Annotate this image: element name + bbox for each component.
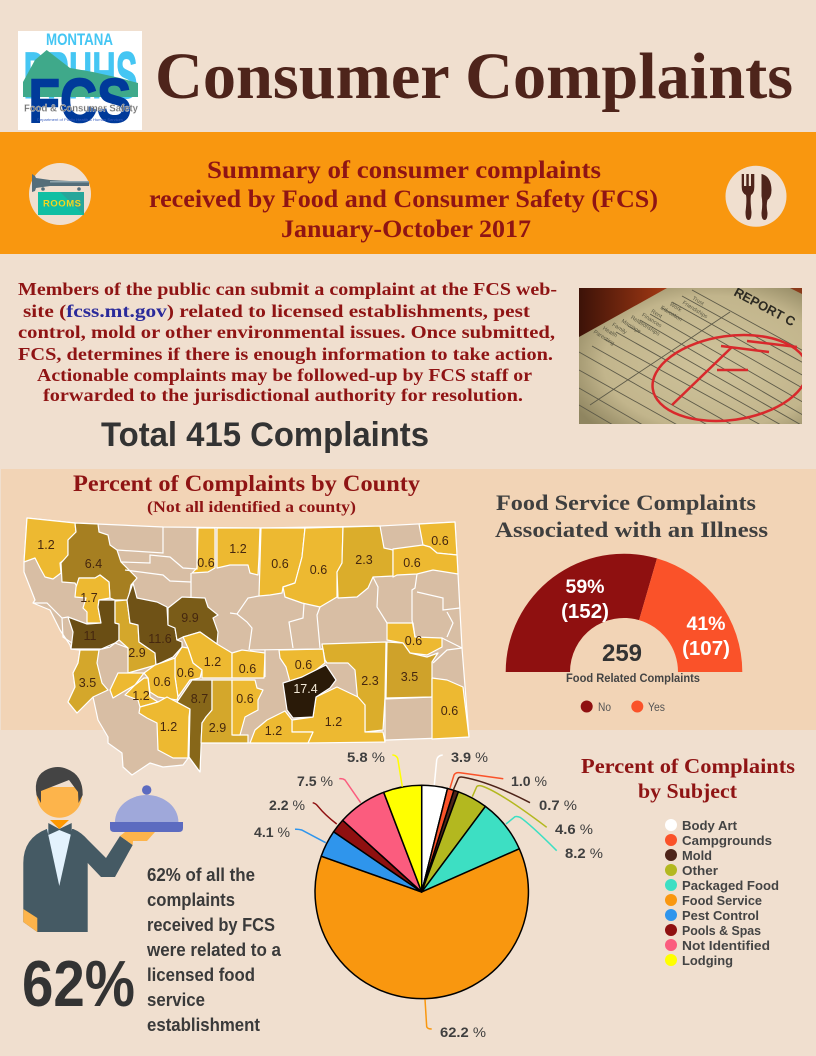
- map: Montana counties: 0.6: [177, 666, 194, 680]
- legend: subjects: Other: [682, 863, 718, 878]
- photo: report card with red F: Family: [611, 322, 628, 336]
- intro text: site ( fcss.mt.gov ) related to licensed establishments, pest: [23, 301, 530, 322]
- map: Montana counties: 2.3: [355, 553, 373, 567]
- icon: waiter with cloche: [23, 767, 183, 932]
- legend: subjects: Pest Control: [682, 908, 759, 923]
- map: Montana counties: 3.5: [79, 676, 96, 690]
- map: Montana counties: 0.6: [431, 534, 449, 548]
- text: 62% description: were related to a: [146, 940, 282, 960]
- pie value labels: 1.0 %: [511, 774, 547, 789]
- intro text: FCS, determines if there is enough information to take action.: [18, 344, 553, 364]
- pie value labels: 0.7 %: [539, 798, 577, 813]
- heading: percent by subject: [581, 754, 795, 803]
- heading: percent by county: (Not all identified a county): [147, 499, 356, 516]
- map: Montana counties: 0.6: [441, 704, 458, 718]
- map: Montana counties: 11.6: [148, 632, 172, 646]
- pie value labels: 4.1 %: [254, 825, 290, 840]
- icon: rooms sign: [29, 163, 91, 225]
- chart: illness half donut: Food Related Complaints: [566, 673, 700, 685]
- chart: illness half donut: (152): [561, 600, 609, 623]
- text: 62% description: complaints: [147, 890, 235, 910]
- map: Montana counties: 1.2: [160, 720, 177, 734]
- map: Montana counties: 0.6: [405, 634, 422, 648]
- chart: subject pie: [254, 750, 603, 1040]
- total complaints heading: Total 415 Complaints: [101, 416, 429, 454]
- legend: subjects: Food Service: [682, 893, 762, 908]
- big stat: 62%: 62%: [22, 947, 135, 1020]
- title: Consumer Complaints: [155, 40, 793, 113]
- logo: Montana DPHHS FCS: MONTANA: [46, 30, 113, 49]
- photo: report card with red F: Relationships: [629, 315, 661, 338]
- text: 62% description: licensed food: [147, 965, 255, 985]
- icon: rooms sign: ROOMS: [43, 198, 81, 210]
- map: Montana counties: 1.2: [132, 689, 150, 703]
- map: Montana counties: 0.6: [403, 556, 421, 570]
- map: Montana counties: 0.6: [271, 557, 289, 571]
- heading: percent by county: [73, 471, 421, 516]
- legend: subjects: Not Identified: [682, 938, 770, 953]
- legend: subjects: Campgrounds: [682, 833, 772, 848]
- legend: subjects: Packaged Food: [682, 878, 779, 893]
- text: 62% description: service: [147, 990, 205, 1010]
- photo: report card with red F: Work: [668, 302, 683, 314]
- legend: subjects: Lodging: [682, 953, 733, 968]
- photo: report card with red F: [579, 288, 802, 424]
- chart: illness half donut: [506, 554, 742, 714]
- pie value labels: [254, 750, 603, 1040]
- map: Montana counties: 8.7: [191, 692, 208, 706]
- map: Montana counties: 2.9: [128, 646, 146, 660]
- logo: Montana DPHHS FCS: Department of Public Health & Human Services: [37, 117, 123, 122]
- legend: illness: [581, 700, 665, 714]
- intro text: [18, 279, 557, 405]
- legend: subjects: Pools & Spas: [682, 923, 761, 938]
- map: Montana counties: 11: [84, 629, 97, 643]
- photo: report card with red F: REPORT C: [732, 284, 798, 329]
- heading: illness: Associated with an Illness: [495, 517, 768, 542]
- logo: Montana DPHHS FCS: DPHHS: [24, 38, 138, 112]
- heading: percent by county: Percent of Complaints by County: [73, 471, 421, 496]
- banner: [0, 132, 816, 254]
- map: Montana counties: 0.6: [153, 675, 171, 689]
- chart: illness half donut: 259: [602, 640, 642, 667]
- map: Montana counties: 2.3: [361, 674, 379, 688]
- map: Montana counties: 6.4: [85, 557, 102, 571]
- pie value labels: 2.2 %: [269, 798, 305, 813]
- text: 62% description: [146, 865, 282, 1035]
- map: Montana counties: 1.2: [229, 542, 247, 556]
- photo: report card with red F: Friendships: [681, 300, 709, 320]
- photo: report card with red F: Rent: [650, 309, 663, 320]
- map: Montana counties: 0.6: [239, 662, 256, 676]
- chart: illness half donut: 41%: [686, 613, 726, 635]
- chart: illness half donut: 59%: [565, 576, 605, 598]
- pie value labels: 4.6 %: [555, 822, 593, 837]
- intro text: forwarded to the jurisdictional authority for resolution.: [43, 385, 523, 405]
- map: Montana counties: 3.5: [401, 670, 418, 684]
- text: 62% description: received by FCS: [147, 915, 275, 935]
- logo: Montana DPHHS FCS: FCS: [28, 67, 132, 136]
- map: Montana counties: 9.9: [181, 611, 199, 625]
- legend: subjects: [665, 818, 779, 968]
- text: 62% description: 62% of all the: [147, 865, 255, 885]
- intro text: Members of the public can submit a complaint at the FCS web-: [18, 279, 557, 299]
- map: Montana counties: 2.9: [209, 721, 226, 735]
- banner heading: Summary of consumer complaints: [207, 157, 601, 184]
- legend: subjects: Body Art: [682, 818, 738, 833]
- map: Montana counties: 1.2: [204, 655, 221, 669]
- map: Montana counties: 1.7: [80, 591, 98, 605]
- map: Montana counties: 17.4: [293, 682, 318, 696]
- heading: percent by subject: Percent of Complaints: [581, 754, 795, 778]
- chart: illness half donut: (107): [682, 637, 730, 660]
- map: Montana counties: 1.2: [265, 724, 282, 738]
- map: Montana counties: 0.6: [197, 556, 215, 570]
- heading: illness: Food Service Complaints: [496, 490, 756, 515]
- map: Montana counties: 1.2: [37, 538, 55, 552]
- pie leader lines: [295, 755, 557, 1029]
- legend: illness: Yes: [648, 702, 665, 714]
- map: Montana counties: [24, 518, 469, 775]
- pie value labels: 7.5 %: [297, 774, 333, 789]
- pie value labels: 3.9 %: [451, 750, 488, 765]
- photo: report card with red F: Health: [601, 326, 618, 339]
- map: Montana counties: 0.6: [295, 658, 312, 672]
- intro text: control, mold or other environmental issues. Once submitted,: [18, 322, 555, 342]
- photo: report card with red F: Trust: [691, 296, 705, 307]
- logo: Montana DPHHS FCS: [18, 30, 142, 136]
- photo: report card with red F: Finances: [640, 312, 663, 329]
- text: 62% description: establishment: [147, 1015, 260, 1035]
- photo: report card with red F: Education: [659, 305, 683, 323]
- photo: report card with red F: Marriage: [620, 319, 642, 335]
- map: Montana counties: 0.6: [310, 563, 327, 577]
- panel: county and illness background: [1, 469, 816, 730]
- legend: subjects: Mold: [682, 848, 712, 863]
- heading: percent by subject: by Subject: [638, 779, 737, 803]
- pie value labels: 5.8 %: [347, 750, 385, 765]
- legend: illness: No: [598, 702, 611, 714]
- pie value labels: 8.2 %: [565, 846, 603, 861]
- intro text: Actionable complaints may be followed-up by FCS staff or: [37, 365, 532, 385]
- logo: Montana DPHHS FCS: Food & Consumer Safety: [24, 102, 138, 114]
- map: Montana counties: 1.2: [325, 715, 342, 729]
- banner heading: received by Food and Consumer Safety (FCS): [149, 186, 658, 213]
- icon: fork and knife: [726, 166, 786, 227]
- pie value labels: 62.2 %: [440, 1025, 486, 1040]
- heading: illness: [495, 490, 768, 542]
- map: Montana counties: 0.6: [236, 692, 254, 706]
- photo: report card with red F: Parenting: [592, 329, 615, 347]
- banner heading: January-October 2017: [281, 216, 531, 243]
- banner heading: [149, 157, 658, 243]
